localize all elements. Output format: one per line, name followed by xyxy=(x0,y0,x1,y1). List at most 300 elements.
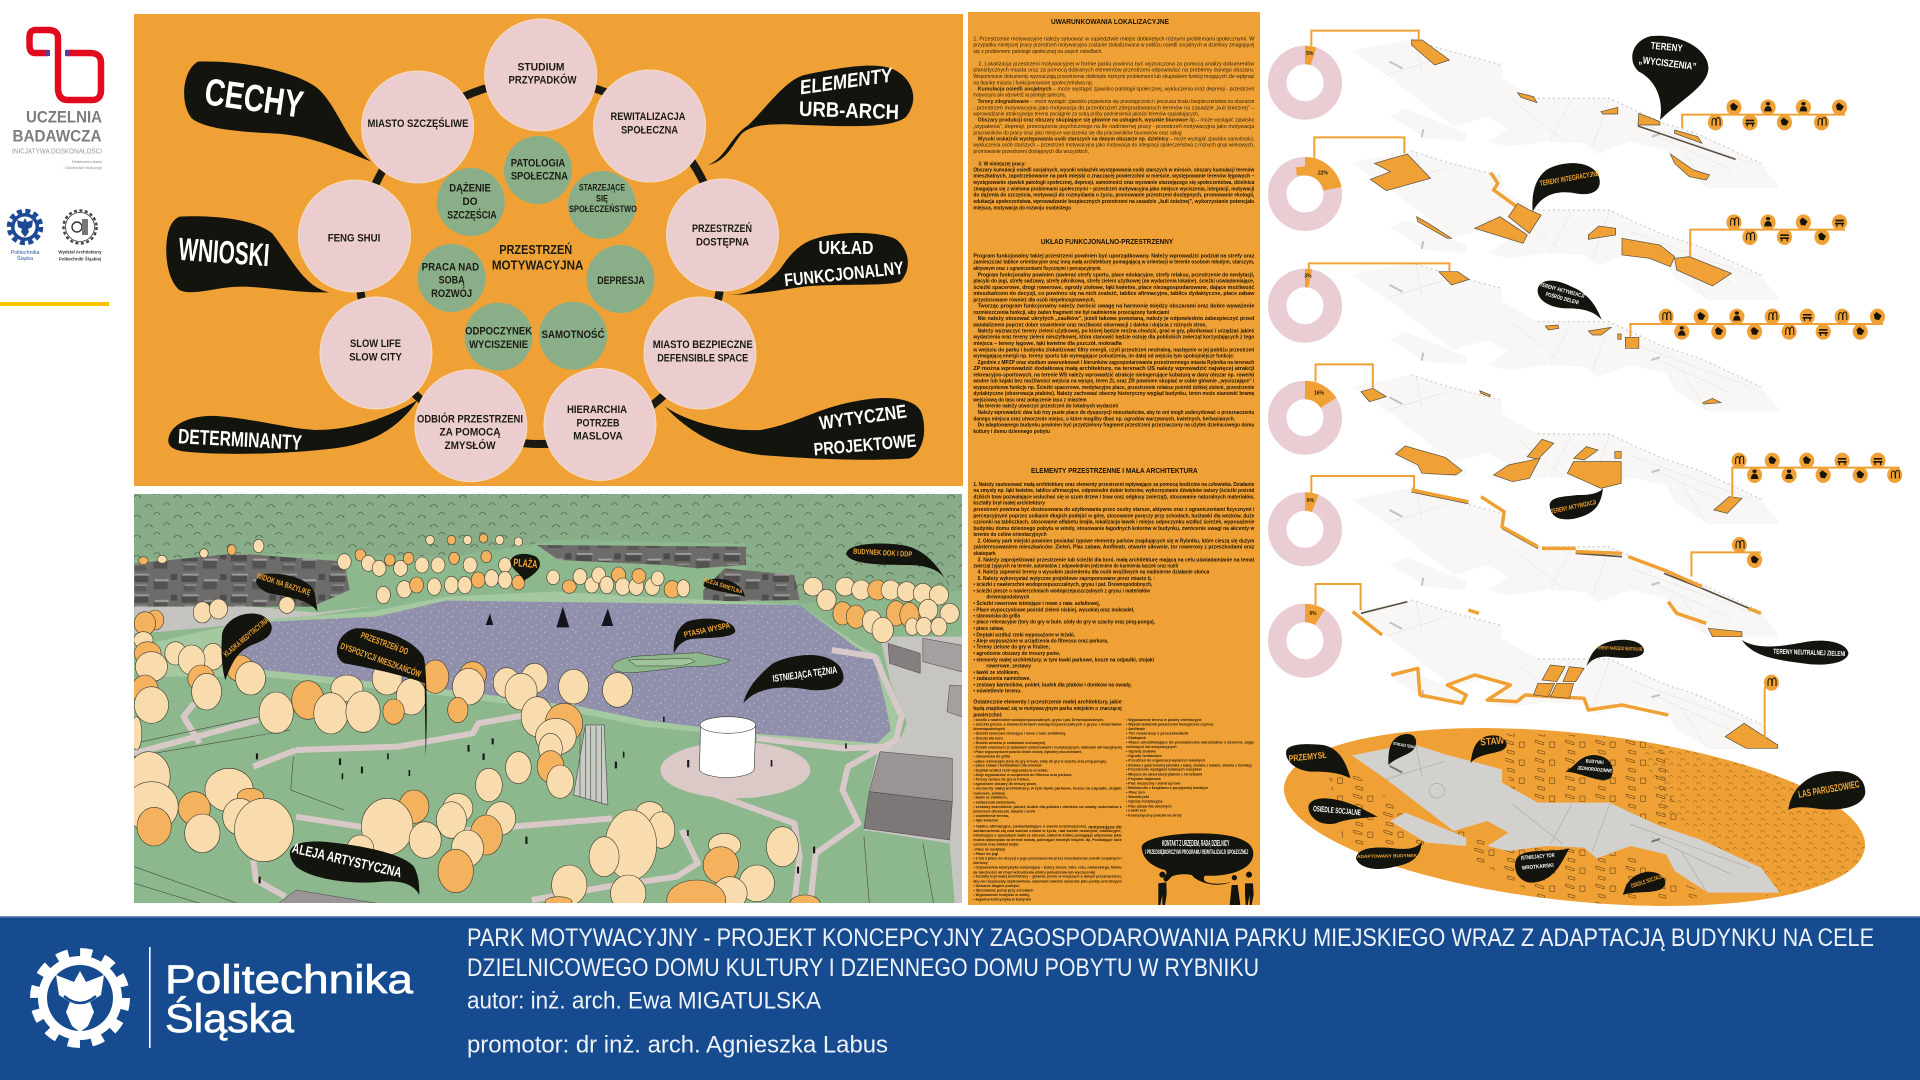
text block: spatial elements: • zestawy karmników, poideł, budek dla ptaków i domków na owady, automatów z xyxy=(973,805,1122,809)
text block: spatial elements: • Przestrzeń do organizacji wydarzeń lokalnych xyxy=(1126,759,1206,763)
logo: Uczelnia Badawcza: Ministerstwo Nauki xyxy=(72,160,102,164)
icons row integration xyxy=(1726,214,1847,245)
plaza xyxy=(660,742,810,798)
hills with forest xyxy=(130,490,970,603)
map stack upper xyxy=(1309,31,1902,524)
text block: spatial elements: • agrodzone obszary do tresury psów, xyxy=(973,782,1037,786)
donut 9%: 9% xyxy=(1309,611,1317,617)
speech bubble labels: URB-ARCH xyxy=(799,98,899,124)
ellipse bubble labels: STAW xyxy=(1480,735,1505,749)
text block: spatial elements: będą znajdować się w motywacyjnym parku miejskim o znaczącej xyxy=(973,706,1122,712)
text block: spatial elements: można wykonywać na terenie miasta, polecające tematyki książek. Itp. Posiadające duże xyxy=(973,838,1122,842)
text block: spatial elements: • place zabaw i huśtawkami dla wózków xyxy=(973,764,1042,768)
panel: text column xyxy=(968,12,1260,905)
text block: localisation and layout: wodne lub kajaki bez możliwości wejścia na wyspę, teren ZL oraz ZR powinien skupiać w sobie głównie „wyciszające” i xyxy=(972,379,1255,385)
text block: spatial elements: • Place umożliwiające do prowadzenia warsztatów z dziećmi, zajęć xyxy=(1126,741,1255,745)
scene bubbles xyxy=(222,543,950,895)
text block: spatial elements: • Ścieżki uważności (z zadaniami oddechowymi i medytacyjnymi, tablicami afirmacyjnymi) xyxy=(973,744,1122,749)
circle labels: DEPRESJA xyxy=(597,275,645,287)
map bubble labels xyxy=(1539,41,1845,658)
title text: DZIELNICOWEGO DOMU KULTURY I DZIENNEGO DOMU POBYTU W RYBNIKU xyxy=(467,954,1259,982)
text block: localisation and layout: do dążenia do szczęścia, motywacji do rozmyślania o życiu, promowanie przestrzeni dostępnych, promowanie ekologii, xyxy=(973,193,1255,199)
panel: functional maps xyxy=(1275,31,1902,931)
text block: spatial elements: • ścieżki z nawierzchni wodoprzepuszczalnych, grysu i pat. Drewnopodobnych, xyxy=(973,582,1153,588)
circle labels: REWITALIZACJA xyxy=(610,111,686,123)
text block: localisation and layout: 3. W niniejszej pracy: xyxy=(978,161,1026,167)
text block: spatial elements: zwierząt żyjących na terenie, automatów z odpowiednim jedzeniem do karmienia kaczek oraz nutrii xyxy=(973,563,1179,569)
leader lines xyxy=(1309,31,1900,498)
text block: spatial elements: • Ścieżki rowerowe istniejące i nowe z naw. asfaltowej, xyxy=(973,731,1066,736)
ring connector xyxy=(358,80,722,444)
panel: concept diagram xyxy=(134,14,963,486)
icons row activity xyxy=(1731,453,1902,483)
speech bubble labels: CECHY xyxy=(202,71,306,127)
text block: localisation and layout: zmagająca się z wieloma problemami społecznymi – przestrzeń motywacyjna jako miejsce wyciszenia, integracji, motywacji xyxy=(973,186,1255,192)
text block: localisation and layout: Obszary kumulacji osiedli socjalnych, wysoki wskaźnik występowania osób starszych w mieście, obszary kumulacji terenów xyxy=(973,167,1255,173)
text block: spatial elements: zastanowienia się nad swoimi celami w życiu, nad swoim rozwojem, edukacyjne, xyxy=(973,829,1122,833)
text block: spatial elements: jedzeniem dla kaczek, łabędzi i nutrii xyxy=(972,810,1035,814)
callout: dialogue bubble with figures xyxy=(1142,833,1254,905)
map bubble labels: TERENY AKTYWIZACJI xyxy=(1539,282,1585,300)
donut 3%: 3% xyxy=(1304,274,1312,280)
map bubble labels: TERENY xyxy=(1650,41,1683,55)
text block: spatial elements: (w zależności od chęci wzbudzenia efektu pobudzenia lub wyciszenia) xyxy=(973,870,1096,874)
text block: localisation and layout: UKŁAD FUNKCJONALNO-PRZESTRZENNY xyxy=(1041,239,1173,246)
circle labels: ZA POMOCĄ xyxy=(440,427,501,439)
text block: spatial elements: • stanowiska do grilla xyxy=(973,755,1011,759)
text block: localisation and layout: wymagającą energii np. tereny sportu lub wymagające pobudzenia, im dalej od wejścia tym spokojniejsze funkcje. xyxy=(972,354,1235,360)
circle labels: PATOLOGIA xyxy=(511,157,565,169)
text block: spatial elements: • Ogrody herbaciane xyxy=(1126,754,1162,758)
circle labels: SLOW CITY xyxy=(349,351,402,363)
map bubbles upper xyxy=(1532,36,1708,320)
logo: Uczelnia Badawcza: UCZELNIA xyxy=(26,108,102,126)
text block: localisation and layout: przypadku niniejszej pracy przestrzeń motywacyjna zostanie zlokalizowana w pobliżu osiedli socjalnych w dzielnicy zmagającej xyxy=(973,43,1254,49)
title text xyxy=(467,924,1874,1058)
text block: localisation and layout: mieszkalnych, zapotrzebowanie na park miejski o znaczącej powierzchni w mieście, występowanie terenów lęgowych – xyxy=(973,174,1254,180)
text block: spatial elements: • Plac muzyczny i stand up'owe xyxy=(1126,781,1181,785)
ellipse bubble labels: ISTNIEJĄCA TĘŻNIA xyxy=(1393,741,1415,749)
ellipse bubble labels xyxy=(1288,735,1860,890)
text block: spatial elements: • Tablice afirmacyjne, uświadamiające o swoim teraźniejszości, motywujące do xyxy=(973,824,1122,829)
text block: localisation and layout: edukacja społeczeństwa, wprowadzanie bezpiecznych przestrzeni na zasadzie „kuli śnieżnej”, wykorzystanie potencjału xyxy=(973,199,1254,205)
ellipse bubble labels: ADAPTOWANY BUDYNEK xyxy=(1357,853,1418,859)
left logos column xyxy=(0,30,109,306)
circle labels: DĄŻENIE xyxy=(449,182,491,195)
circle labels: SOBĄ xyxy=(439,275,465,287)
scene labels: ISTNIEJĄCA TĘŻNIA xyxy=(772,663,838,685)
text block: spatial elements: na zmysły np. łąki kwietne, tablice afirmacyjne, odpowiedni dobór kolorów, wykorzystanie dźwięków natury (ścieżki pośród xyxy=(973,488,1254,494)
text block: localisation and layout: dydaktyczne (obserwacja ptaków). Należy zachować obecny historyczny wygląd budynku, teren może stanowić bramę xyxy=(973,391,1254,397)
text block: localisation and layout: Do adaptowanego budynku powinien być przydzielony fragment przestrzeni przeznaczony na użytek dzielnicowego domu xyxy=(978,423,1254,429)
ellipse bubble labels: JEDNORODZINNE xyxy=(1577,765,1613,775)
text block: spatial elements: • ścieżki piesze o nawierzchniach wodoprzepuszczalnych z grysu i materiałów xyxy=(973,722,1122,726)
circle labels: POTRZEB xyxy=(576,417,620,429)
scene labels: KLADKA MEDYTACYJNA xyxy=(222,616,271,659)
text block: localisation and layout: Tereny zdegradowane – może wystąpić zjawisko pojawienia się przestępczości i poczucia braku bezpieczeństwa na obszarze xyxy=(978,99,1254,105)
circle labels: ZMYSŁÓW xyxy=(444,439,496,452)
donut 16%: 16% xyxy=(1314,390,1325,396)
text block: localisation and layout: placyki do jogi, strefę sadzawy, strefę piknikową, strefę zieleni użytkowej (na wydarzenia lokalne), ścieżki uświadamiające, xyxy=(973,279,1255,285)
text block: spatial elements: • Place do medytacji xyxy=(973,847,1005,851)
text block: spatial elements: • Skatepark xyxy=(1126,736,1147,740)
text block: spatial elements: • Deptaki wzdłuż rzeki wyposażone w leżaki, xyxy=(973,632,1076,638)
logo: Wydział Architektury xyxy=(58,210,102,262)
text block: localisation and layout: Program funkcjonalny takiej przestrzeni powinien być uporządkowany. Należy wprowadzić podział na strefy oraz xyxy=(973,254,1255,260)
circle labels: SPOŁECZEŃSTWO xyxy=(569,204,637,214)
text block: spatial elements: rowerowe, zestawy xyxy=(986,664,1031,670)
map bubble labels: TERENY NEUTRALNEJ ZIELENI xyxy=(1773,649,1845,658)
map: neutral greenery xyxy=(1352,488,1780,637)
speech bubble labels: FUNKCJONALNY xyxy=(783,258,905,290)
speech bubble labels xyxy=(177,64,917,459)
text block: spatial elements: • ławki ze stolikiem, xyxy=(973,670,1020,676)
scene labels: WIDOK NA BAZYLIKĘ xyxy=(256,571,312,597)
text block: spatial elements: • Wyposażenie budynku w windy, xyxy=(973,893,1030,897)
text block: localisation and layout: wydarzenia oraz tereny zieleni nieużytkowej, która stanowić będzie ostoję dla pobliskich zwierząt korzystających z tego xyxy=(972,335,1254,341)
text block: spatial elements: • place rekreacyjne (tory do gry w bule, stoły do gry w szachy oraz ping-ponga), xyxy=(973,620,1156,626)
text block: localisation and layout: Wysoki wskaźnik występowania osób starszych na danym obszarze np. dzielnicy – może wystąpić zjawisko samotności, xyxy=(978,136,1254,142)
text block: spatial elements: • ławki ze stolikiem, xyxy=(973,796,1008,800)
text block: localisation and layout: Kumulacja osiedli socjalnych – może wystąpić zjawisko patologii społecznej, wykluczenia oraz depresji - przestrzeń xyxy=(978,86,1254,92)
text block: spatial elements: 1. Należy zastosować małą architekturę oraz elementy przestrzeni wpływające za pomocą bodźców na człowieka. Działanie xyxy=(973,482,1254,488)
circle labels: PRZESTRZEŃ xyxy=(692,222,752,235)
text block: spatial elements: rowerowe, zestawy xyxy=(973,791,1006,795)
text block: localisation and layout: wprowadzanie atrakcyjnego terena pociągnie za sobą próby podniesienia jakości terenów sąsiadujących, xyxy=(973,112,1199,118)
ellipse bubble labels: WROTKARSKI xyxy=(1522,863,1554,872)
text block: localisation and layout: wandalizmem poprzez dobre oświetlenie oraz możliwość obserwacji z daleka i dojścia z różnych stron, xyxy=(972,322,1207,328)
circle labels: STARZEJĄCE xyxy=(579,183,625,193)
text block: spatial elements: • Amfiteatr xyxy=(1126,727,1145,731)
donut 9% xyxy=(1277,611,1333,668)
logo: Wydział Architektury: Politechniki Śląskiej xyxy=(59,256,101,262)
text block: spatial elements: • elementy małej architektury, w tym ławki parkowe, kosze na odpadki, stojaki xyxy=(973,787,1122,791)
circle labels: SZCZĘŚCIA xyxy=(447,208,497,221)
text block: localisation and layout: UWARUNKOWANIA LOKALIZACYJNE xyxy=(1051,19,1169,26)
text block: spatial elements: • Tereny zielone do gry w frisbee, xyxy=(973,777,1030,781)
text block: spatial elements: Ostatecznie elementy i przestrzenie małej architektury, jakie xyxy=(973,700,1122,706)
text block: spatial elements: • Wysoki wskaźnik powierzchni biologicznie czynnej xyxy=(1126,722,1213,726)
text block: localisation and layout: mieszkańcom do decyzji, co powinno się na nich znaleźć, tablice afirmacyjne, tablice dydaktyczne, place zabaw xyxy=(973,291,1255,297)
text block: spatial elements: • Place wypoczynkowe pośród zieleni niskiej, wysokiej oraz mokradeł, xyxy=(973,607,1135,613)
text block: localisation and layout: wejściową do lasu oraz połączenie lasu z miastem xyxy=(972,397,1087,403)
icons row quiet xyxy=(1708,99,1847,130)
callout: dialogue bubble with figures: KONTAKT Z URZĘDEM, RADĄ DZIELNICY xyxy=(1162,839,1230,848)
text block: spatial elements: • łąki kwietne xyxy=(973,819,998,823)
text block: localisation and layout: motywacyjna jako odpowiedź na patologię społeczną, xyxy=(973,93,1066,99)
text block: spatial elements: • place zabaw, xyxy=(973,626,1005,632)
people xyxy=(256,717,847,883)
circle labels: ODPOCZYNEK xyxy=(465,326,532,338)
callout: dialogue bubble with figures: I PRZEDSIĘBIORCZYMI PROGRAMU REWITALIZACJI SPOŁECZNEJ xyxy=(1145,849,1248,856)
map bubble labels: TERENY AKTYWIZACJI xyxy=(1550,499,1597,516)
text block: spatial elements: • Stosowanie pomp przy schodach xyxy=(973,889,1034,893)
scene labels: ALEJA ŚWIETLNA xyxy=(703,577,744,596)
buildings right xyxy=(275,638,970,907)
text block: spatial elements: • Place wypoczynkowe pośród zieleni niskiej, wysokiej oraz mokradeł, xyxy=(973,750,1082,754)
map: quiet areas xyxy=(1352,39,1780,188)
text block: spatial elements: • 2 lub 3 place do decyzji o jego przeznaczeniu przez mieszkańców osiedli socjalnych i xyxy=(973,856,1122,860)
map: activation among greenery xyxy=(1352,263,1780,412)
white cylinder xyxy=(699,717,756,778)
panel: park visualisation xyxy=(125,490,970,920)
text block: localisation and layout: wykluczenia osób starszych – przestrzeń motywacyjna jako motywacja do integracji społeczeństwa z różnych grup wiekowych, xyxy=(973,143,1254,149)
scene labels: ALEJA ARTYSTYCZNA xyxy=(291,840,403,880)
text block: localisation and layout: promowanie przestrzeni dostępnych dla wszystkich, xyxy=(973,149,1089,155)
donut 22%: 22% xyxy=(1318,170,1329,176)
slatted structure xyxy=(574,725,608,805)
text block: localisation and layout: aktywnym oraz z ograniczeniami fizycznymi i percepcyjnymi. xyxy=(973,266,1102,272)
text block: localisation and layout: ZP można wprowadzić dodatkową małą architekturę, na terenach US należy wprowadzić najwięcej atrakcji xyxy=(973,366,1255,372)
text block: localisation and layout: wypoczynkowe funkcje np. Ścieżki spacerowe, medytacyjne place, przestrzenie relaksu pośród dzikiej zieleni, przestrzenie xyxy=(972,384,1254,391)
text block: spatial elements: • Przystań kajakowa xyxy=(1126,777,1161,781)
ellipse bubble labels: LAS PARUSZOWIEC xyxy=(1798,779,1860,801)
text block: spatial elements: czcionki oraz alfabet brajla xyxy=(973,843,1019,847)
map: context ellipse xyxy=(1284,728,1866,906)
text block: spatial elements: • zadaszenia namiotowe, xyxy=(973,676,1031,682)
donut 5% xyxy=(1277,51,1333,110)
chart: donuts xyxy=(1277,51,1333,668)
text block: spatial elements: • oświetlenie terenu, xyxy=(973,814,1009,818)
text block: spatial elements: • ścieżki piesze o nawierzchniach wodoprzepuszczalnych z grysu i materiałów xyxy=(973,588,1151,594)
text block: spatial elements: • zestawy karmników, poideł, budek dla ptaków i domków na owady, xyxy=(973,682,1132,688)
text block: spatial elements: • Ścieżki dla koni xyxy=(973,735,1003,740)
speech bubble labels: UKŁAD xyxy=(818,238,874,258)
text block: localisation and layout: planistycznych miasta oraz za pomocą dobranych elementów przestrzeni odpowiadać na problemy danego obszaru. xyxy=(973,68,1254,74)
logo: Uczelnia Badawcza: BADAWCZA xyxy=(12,126,102,146)
text block: localisation and layout: rozmieszczenia funkcji, aby żaden fragment nie był nadmiernie przeciążony funkcjami xyxy=(973,310,1170,316)
sailboats xyxy=(486,607,613,627)
text block: spatial elements: • Kolorystyczny podział na strefy xyxy=(1126,813,1182,817)
ellipse bubble labels: BUDYNKI xyxy=(1585,759,1604,766)
text block: spatial elements: drewnopodobnych xyxy=(973,727,1006,731)
circle labels: MIASTO SZCZĘŚLIWE xyxy=(368,117,468,130)
text block: spatial elements: terenie do celów orientacyjnych xyxy=(973,532,1047,538)
scene labels: DYSPOZYCJI MIESZKAŃCÓW xyxy=(339,640,423,679)
trees middle and foreground xyxy=(125,597,820,920)
text block: spatial elements: • Miejsca do obserwacji ptaków z lornetkami xyxy=(1126,772,1202,776)
paths xyxy=(810,650,901,903)
text block: localisation and layout: Nie należy stosować ukrytych „zaułków”, jeżeli takowe powstaną, należy je odpowiednio zabezpieczyć przed xyxy=(978,316,1254,322)
donut 22% xyxy=(1277,166,1333,222)
circle labels: ROZWÓJ xyxy=(431,287,472,300)
logo: Politechnika Śląska: Politechnika xyxy=(165,958,414,1002)
text block: localisation and layout xyxy=(972,19,1255,435)
scene drawing xyxy=(125,490,970,920)
circle labels: PRZESTRZEŃ xyxy=(499,242,572,257)
text block: spatial elements: 4. Należy zapewnić tereny o wysokim zacienieniu dla osób wrażliwych na nadmierne działanie słońca xyxy=(978,570,1209,576)
logo: Uczelnia Badawcza: i Szkolnictwo Wyższego xyxy=(64,166,102,170)
circle labels: MIASTO BEZPIECZNE xyxy=(653,339,753,351)
text block: spatial elements: • Wodotryski xyxy=(1126,795,1149,799)
circle labels: PRZYPADKÓW xyxy=(508,74,577,87)
logo: Politechnika Śląska xyxy=(34,947,414,1048)
map bubble labels: TERENY NARZĘDZI NEUTRALNE xyxy=(1597,645,1643,653)
title text: autor: inż. arch. Ewa MIGATULSKA xyxy=(467,988,821,1014)
map: neutral border areas xyxy=(1352,600,1780,749)
lake xyxy=(221,601,891,743)
ellipse bubble labels: OSIEDLE SOCJALNE xyxy=(1313,804,1362,817)
text block: spatial elements: drewnopodobnych xyxy=(986,595,1029,601)
green circles xyxy=(418,136,654,371)
speech bubble labels: WNIOSKI xyxy=(177,231,271,273)
text block: spatial elements: • Ławki zen xyxy=(1126,809,1147,813)
speech bubble labels: WYTYCZNE xyxy=(818,401,908,435)
circle labels: MOTYWACYJNA xyxy=(492,258,584,272)
circle labels: FENG SHUI xyxy=(328,232,380,244)
text block: localisation and layout: - przestrzeń motywacyjna jako motywacja do przeobrażeń zdegradowanych terenów na zasadzie „kuli śnieżnej” – xyxy=(973,105,1254,111)
text block: spatial elements: • Stoiska z gastronomią (stoiska z kawą, stoiska z lodami, stoiska z herbatą) xyxy=(1126,763,1252,767)
logo: Uczelnia Badawcza: INICJATYWA DOSKONAŁOŚCI xyxy=(12,146,102,156)
text block: localisation and layout: przystosowane również dla osób niepełnosprawnych, xyxy=(973,297,1096,303)
text block: spatial elements: percepcyjnymi poprzez unikanie długich podejść w górę, stosowanie poręczy przy schodach, huśtawki dla wózków, duże xyxy=(973,513,1254,519)
text block: spatial elements: 3. Należy zaprojektować przestrzenie lub ścieżki dla koni, małą architekturę mającą na celu uświadamianie na temat xyxy=(978,557,1255,563)
circle labels: SPOŁECZNA xyxy=(621,125,678,137)
logo: Politechnika Śląska small xyxy=(9,211,41,262)
text block: spatial elements: • Ścieżki rowerowe istniejące i nowe z naw. asfaltowej, xyxy=(973,600,1101,607)
ellipse bubble labels: PRZEMYSŁ xyxy=(1288,750,1327,764)
circle labels: SPOŁECZNA xyxy=(511,171,568,183)
circle labels: DOSTĘPNA xyxy=(696,236,749,248)
text block: spatial elements: • Unikanie długich podejść, xyxy=(973,884,1020,888)
text block: spatial elements: • Aleje wyposażone w urządzenia do fitnessu oraz parkura, xyxy=(973,639,1109,645)
text block: spatial elements: zainteresowaniem mieszkańców: Zieleń, Plac zabaw, Amfiteatr, otwarte siłownie, tor rowerowy z przeszkodami oraz xyxy=(973,545,1255,551)
text block: spatial elements: • Aleje wyposażone w urządzenia do fitnessu oraz parkura, xyxy=(973,773,1072,777)
circle labels: HIERARCHIA xyxy=(567,404,627,416)
donut 6% xyxy=(1277,498,1333,557)
text block: spatial elements: • stanowiska do grilla xyxy=(973,613,1020,619)
text block: localisation and layout: „wypalenia”, depresji, przeciążenia psychicznego na tle nadmiernej pracy - przestrzeń motywacyjna jako motywacja xyxy=(973,124,1254,130)
text block: spatial elements: • Tereny zielone do gry w frisbee, xyxy=(973,645,1051,651)
leader lines lower xyxy=(1311,476,1765,740)
text block: localisation and layout: kultury i domu dziennego pobytu xyxy=(973,429,1050,435)
scene labels: BUDYNEK DOK I DDP xyxy=(853,547,912,559)
ellipse bubbles xyxy=(1286,734,1865,895)
logo: Politechnika Śląska small: Śląska xyxy=(17,254,33,262)
donut 16% xyxy=(1277,390,1333,445)
text block: spatial elements: dzikich traw pozwalające wsłuchać się w szum drzew i traw oraz odgłosy zwierząt), stosowanie naturalnych materiałów, xyxy=(973,494,1255,500)
text block: localisation and layout: miejsca – tereny lęgowe, łąki kwietne dla pszczół, mokradła xyxy=(973,341,1122,347)
scene labels: PLAŻA xyxy=(513,556,538,571)
text block: localisation and layout: się z problemem patologii społecznej na swych osiedlach. xyxy=(973,49,1103,55)
text block: spatial elements: ruchowych lub motywacyjnych xyxy=(1126,745,1177,749)
scene labels: PTASIA WYSPA xyxy=(683,621,731,639)
ellipse bubble labels: ISTNIEJĄCY TOR xyxy=(1521,853,1555,862)
text block: localisation and layout: 2. Lokalizacja przestrzeni motywacyjnej w formie parku powinna być wyznaczona za pomocą analizy dokumentów xyxy=(978,61,1255,67)
text block: spatial elements: • Kształty brył małej architektury – głównie proste w miejscach o danym przeznaczeniu, xyxy=(973,875,1122,879)
text block: spatial elements: informujące o sposobach walki ze stresem, nakłonić krótko pomagając aktywować jakie xyxy=(973,834,1122,838)
text block: localisation and layout: Należy wprowadzić dwa lub trzy puste place do dyspozycji mieszkańców, aby to oni mogli zadecydować o przeznaczeniu xyxy=(978,410,1254,416)
title text: promotor: dr inż. arch. Agnieszka Labus xyxy=(467,1032,888,1058)
text block: localisation and layout: Program funkcjonalny powinien zawierać strefy sportu, place edukacyjne, strefy relaksu, przestrzenie do medytacji, xyxy=(978,272,1255,278)
text block: spatial elements: • Plac zen xyxy=(1126,791,1146,795)
donut 3% xyxy=(1277,274,1333,333)
logo: Uczelnia Badawcza xyxy=(12,30,102,170)
text block: localisation and layout: rekreacyjno-sportowych, na terenie WS należy wprowadzić atrakcje nieingerujące kubaturą w dany obszar np. rowerki xyxy=(973,372,1255,378)
text block: spatial elements: • Place do jogi xyxy=(973,852,998,856)
text block: spatial elements: • Plac zabaw dla dorosłych xyxy=(1126,804,1172,808)
text block: spatial elements: aby nie rozpraszały użytkowników, natomiast niektóre wyraziste jako punkty orientacyjne xyxy=(973,879,1122,883)
circle labels xyxy=(328,62,753,452)
island xyxy=(612,653,730,673)
footer banner xyxy=(0,916,1920,1080)
yellow divider xyxy=(0,302,109,306)
pink circles xyxy=(298,19,778,482)
text block: localisation and layout: występowanie zjawisk patologii społecznej, depresji, samotności oraz wyzwanie starzejącego się społeczeństwa, dzielnica xyxy=(972,180,1254,186)
logo: Wydział Architektury: Wydział Architektury xyxy=(58,250,102,254)
donut 5%: 5% xyxy=(1306,51,1314,57)
circle labels: ODBIÓR PRZESTRZENI xyxy=(417,412,523,425)
city blocks xyxy=(134,553,350,610)
text block: spatial elements: • ścieżki z nawierzchni wodoprzepuszczalnych, grysu i pat. Drewnopodobnych, xyxy=(973,718,1104,722)
map bubble labels: POŚRÓD ZIELENI xyxy=(1545,290,1580,306)
text block: spatial elements: • elementy małej architektury, w tym ławki parkowe, kosze na odpadki, stojaki xyxy=(973,657,1155,663)
text block: localisation and layout: na tkankę miasta i funkcjonowanie społeczeństwa np. xyxy=(973,80,1093,86)
circle labels: MASLOVA xyxy=(573,431,623,443)
speech bubble labels: PROJEKTOWE xyxy=(813,431,917,459)
text block: localisation and layout: miejsca, motywacja do rozwoju osobistego xyxy=(973,205,1071,211)
gray ground right xyxy=(864,637,970,907)
text block: spatial elements: • agrodzone obszary do tresury psów, xyxy=(973,651,1061,657)
lake shore xyxy=(134,592,899,750)
scene labels xyxy=(222,547,912,880)
text block: spatial elements: • łagodna kolorystyka w budynku xyxy=(973,898,1032,902)
scene labels: PRZESTRZEŃ DO xyxy=(359,630,410,657)
text block: spatial elements: budynku domu dziennego pobytu w windy, stosowanie łagodnych kolorów w budynku, zwrócenie uwagi na akcenty w xyxy=(973,526,1255,532)
text block: spatial elements: • place rekreacyjne (tory do gry w bule, stoły do gry w szachy oraz ping-ponga), xyxy=(973,759,1107,763)
speech bubble labels: DETERMINANTY xyxy=(177,425,303,455)
circle labels: DO xyxy=(462,196,478,208)
text block: spatial elements: 2. Główny park miejski powinien posiadać typowe elementy parków znajdujących się w Rybniku, które cieszą się dużym xyxy=(978,538,1255,544)
circle labels: SLOW LIFE xyxy=(350,338,401,350)
ellipse bubble labels: OSIEDLE SOCJALNE xyxy=(1630,873,1666,890)
text block: localisation and layout: ścieżki spacerowe, drogi rowerowe, ogrody ziołowe, łąki kwietne, place niezagospodarowane, dające możliwość xyxy=(973,285,1254,291)
text block: spatial elements: • Ścieżki zdrowia (z zadaniami ruchowymi) xyxy=(973,740,1046,745)
text block: spatial elements: przestrzeń powinna być dostosowana do użytkowania przez osoby starsze, aktywne oraz z ograniczeniami fizycznymi i xyxy=(973,507,1255,513)
text block: localisation and layout: Tworząc program funkcjonalny należy zwrócić uwagę na harmonię między obszarami oraz dobre wyważenie xyxy=(978,304,1254,310)
map: integration areas xyxy=(1352,151,1780,300)
text block: localisation and layout: Wspomniane dokumenty wyznaczają przestrzenie dotknięte różnymi problemami lub skupiskiem funkcji mogących źle wpłynąć xyxy=(973,74,1255,80)
text block: localisation and layout: Zgodnie z MPZP oraz studium uwarunkowań i kierunków zagospodarowania przestrzennego miasta Rybnika na terenach xyxy=(978,360,1254,366)
text block: localisation and layout: Na terenie należy utworzyć przestrzeń do lokalnych wydarzeń xyxy=(978,404,1118,410)
text block: spatial elements: 5. Należy wykorzystać wytyczne projektowe zaproponowane przez miasto tj. : xyxy=(978,576,1155,582)
logo: Politechnika Śląska: Śląska xyxy=(165,995,295,1041)
circle labels: WYCISZENIE xyxy=(469,339,528,351)
text block: spatial elements: • Ogrody medytacyjne xyxy=(1126,800,1163,804)
map bubble labels: „WYCISZENIA” xyxy=(1638,55,1697,73)
text block: localisation and layout: pracowników do pracy oraz jako miejsce wyciszenia się dla pracowników biurowców oraz usług xyxy=(973,130,1182,136)
map: activity areas xyxy=(1352,375,1780,524)
text block: localisation and layout: w wejściu do parku i budynku zlokalizować filtry energii, czyli przestrzeń neutralną, następnie w jej pobliżu przestrzeń xyxy=(972,347,1254,353)
text block: spatial elements: • Odpowiednia kolorystyka motywująca – kolory zieleni, żółci, różu, niebieskiego, fioletu xyxy=(973,866,1122,870)
text block: spatial elements: • Biblioteczki z książkami o pozytywnej tematyce xyxy=(1126,786,1208,790)
far bank trees xyxy=(139,534,690,604)
text block: localisation and layout: zamieszczać tablice orientacyjne oraz inną małą architekturę pomagającą w orientacji w terenie osobom młodym, starszym, xyxy=(973,260,1255,266)
text block: spatial elements: skatepark xyxy=(973,551,996,557)
text block: spatial elements xyxy=(972,468,1255,902)
text block: localisation and layout: 1. Przestrzenie motywacyjne należy sytuować w sąsiedztwie miejsc dotkniętych różnymi problemami społecznymi. W xyxy=(973,36,1254,42)
text block: spatial elements: • Wyposażenie terenu w punkty orientacyjne xyxy=(1126,718,1202,722)
text block: spatial elements: ELEMENTY PRZESTRZENNE I MAŁA ARCHITEKTURA xyxy=(1031,468,1198,475)
text block: spatial elements: • Przestrzenie wystąpień lokalnych muzyków xyxy=(1126,768,1202,772)
text block: spatial elements: czcionki na tabliczkach, stosowanie alfabetu brajla, lokalizacja ławek i miejsc odpoczynku wzdłuż ścieżek, wyposażenie xyxy=(973,520,1254,526)
circle labels: SAMOTNOŚĆ xyxy=(542,328,605,341)
text block: localisation and layout: Obszary produkcji oraz obszary skupiające się głównie na usługach, wysokie biurowce itp.– może wystąpić zjawisko xyxy=(978,118,1254,124)
text block: spatial elements: • Tor rowerowy z przeszkodami xyxy=(1126,731,1188,735)
text block: spatial elements: • Ogrody ziołowe xyxy=(1126,750,1156,754)
icons row activation xyxy=(1659,309,1885,340)
logo: Politechnika Śląska small: Politechnika xyxy=(10,250,40,256)
